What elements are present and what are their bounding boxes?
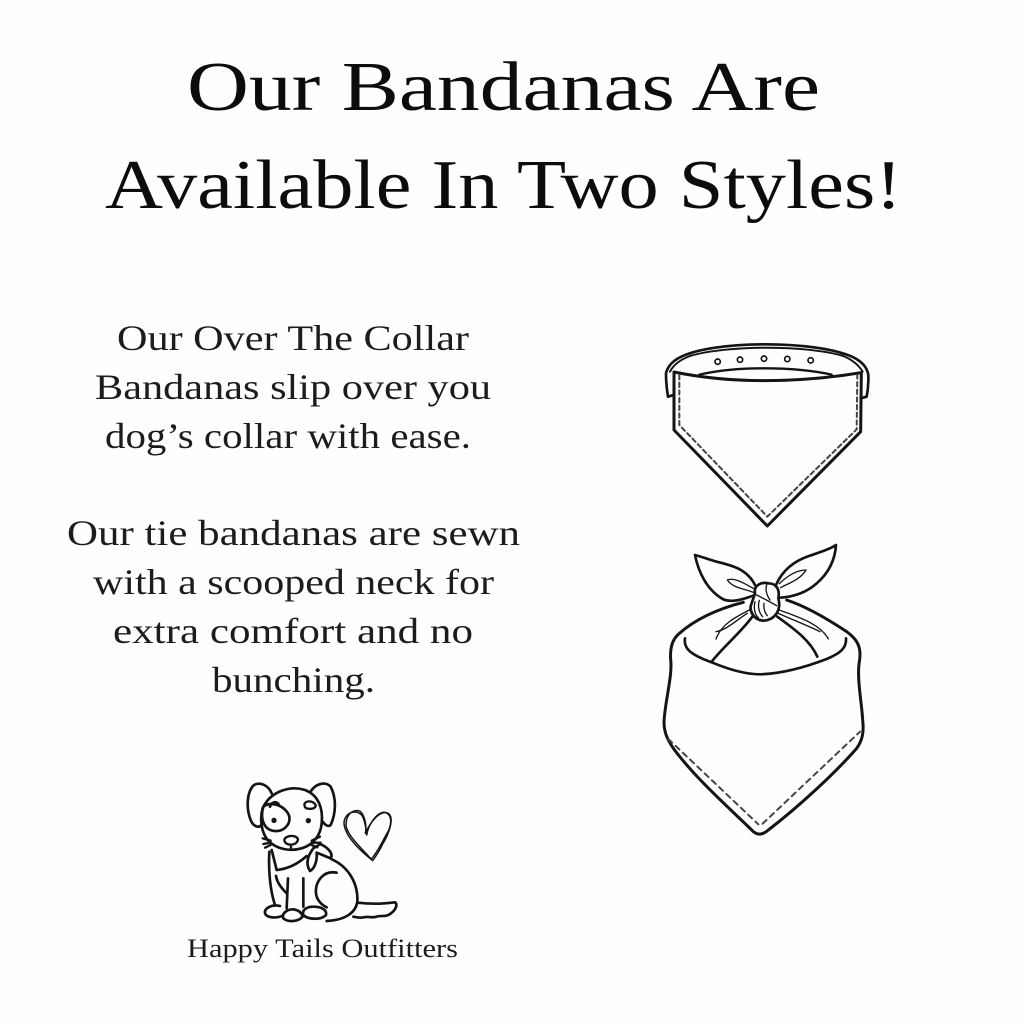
body bbox=[269, 852, 357, 921]
logo: dog and heart bbox=[248, 784, 396, 921]
icon: over the collar bandana bbox=[666, 344, 868, 526]
text block: tie bandana description: extra comfort and no bbox=[113, 611, 473, 651]
scarf bbox=[272, 844, 331, 871]
dog head bbox=[261, 788, 322, 850]
right tie bbox=[776, 545, 836, 598]
body outline bbox=[664, 600, 863, 834]
text block: tie bandana description: with a scooped neck for bbox=[93, 562, 494, 602]
text block: tie bandana description: Our tie bandanas are sewn bbox=[67, 513, 520, 553]
icon: tie bandana bbox=[664, 545, 863, 834]
knot bbox=[751, 583, 779, 621]
heart bbox=[344, 811, 391, 861]
neck line bbox=[685, 638, 846, 674]
text block: over the collar description bbox=[95, 318, 491, 456]
text block: tie bandana description: bunching. bbox=[212, 660, 375, 700]
stitching bbox=[668, 732, 860, 824]
text block: tie bandana description bbox=[67, 513, 520, 700]
logo caption: Happy Tails Outfitters bbox=[187, 934, 458, 963]
left tie bbox=[695, 555, 755, 601]
text block: over the collar description: dog’s collar with ease. bbox=[105, 416, 471, 456]
title: Our Bandanas Are bbox=[187, 49, 820, 126]
title bbox=[105, 49, 902, 224]
eye patches and eyes bbox=[262, 802, 289, 831]
text block: over the collar description: Bandanas slip over you bbox=[95, 367, 491, 407]
text block: over the collar description: Our Over The Collar bbox=[117, 318, 469, 358]
straps bbox=[712, 617, 817, 662]
dog ears bbox=[248, 784, 335, 827]
nose and whiskers bbox=[263, 836, 321, 850]
paws bbox=[265, 905, 326, 921]
tail bbox=[353, 902, 396, 918]
title: Available In Two Styles! bbox=[105, 147, 902, 224]
